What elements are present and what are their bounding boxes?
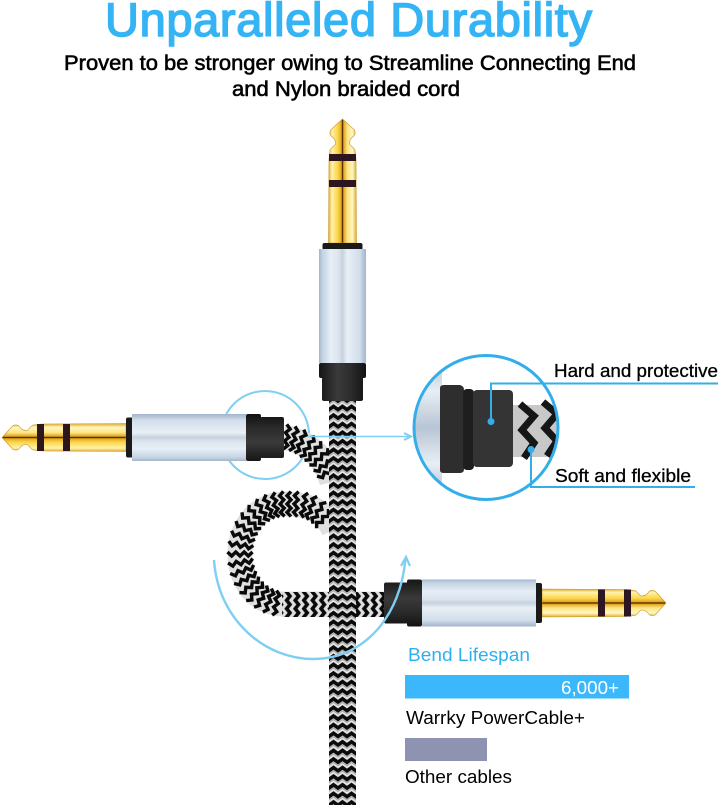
callout: hard and protective: Hard and protective: [554, 361, 718, 381]
bend lifespan heading: Bend Lifespan: [408, 645, 530, 665]
subtitle: and Nylon braided cord: [232, 78, 460, 101]
left plug: [2, 414, 284, 461]
arrow to detail circle: [308, 433, 411, 440]
subtitle: [64, 52, 636, 101]
right plug: [384, 580, 666, 626]
bar: other cables: [405, 738, 487, 761]
callout: soft and flexible: [528, 446, 695, 487]
vertical braided cable: [329, 400, 356, 805]
callout: hard and protective: [488, 361, 718, 425]
bar: Warrky PowerCable+: [405, 675, 629, 698]
subtitle: Proven to be stronger owing to Streamline Connecting End: [64, 52, 636, 75]
label: Warrky PowerCable+: Warrky PowerCable+: [406, 708, 585, 728]
highlight ring on left plug: [221, 391, 309, 479]
detail circle: [410, 355, 561, 500]
top plug: [319, 119, 366, 401]
callout: soft and flexible: Soft and flexible: [555, 466, 691, 486]
bend arc arrow: [214, 557, 410, 659]
bar: Warrky PowerCable+: 6,000+: [561, 678, 619, 698]
label: other cables: Other cables: [405, 767, 512, 787]
braided cable loop: [228, 491, 386, 617]
braided cable from left plug: [283, 424, 341, 482]
